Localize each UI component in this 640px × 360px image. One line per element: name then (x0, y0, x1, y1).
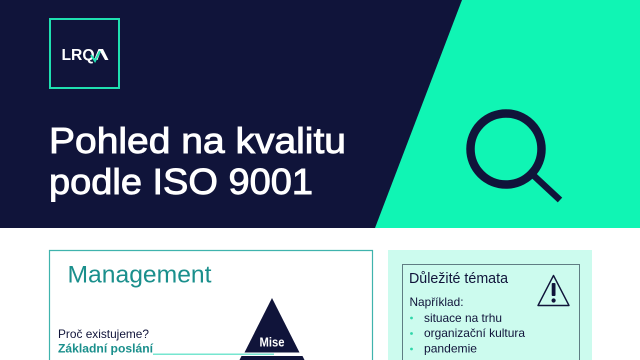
header panel (0, 0, 640, 228)
text: question: Proč existujeme? (58, 327, 149, 341)
title (49, 120, 346, 202)
label: mission: Mise (260, 334, 284, 350)
pyramid divider (244, 353, 301, 355)
list: topics: organizační kultura (424, 326, 525, 340)
panel: important topics (388, 250, 592, 360)
title: Pohled na kvalitu (49, 120, 346, 161)
mint diagonal panel (375, 0, 640, 228)
pyramid (153, 298, 304, 360)
text: for example: Například: (410, 295, 464, 309)
text: core purpose: Základní poslání (58, 342, 154, 356)
logo (50, 19, 119, 88)
heading: management: Management (68, 262, 212, 288)
leader line (153, 354, 274, 355)
panel: management (50, 250, 372, 360)
icon: warning triangle (538, 276, 569, 306)
list: topics (410, 311, 525, 356)
heading: important topics: Důležité témata (409, 271, 509, 287)
icon: magnifying glass (470, 114, 560, 200)
list: topics: situace na trhu (424, 311, 502, 325)
logo: LRQ (62, 47, 94, 64)
list: topics: pandemie (424, 342, 477, 356)
title: podle ISO 9001 (49, 161, 313, 202)
